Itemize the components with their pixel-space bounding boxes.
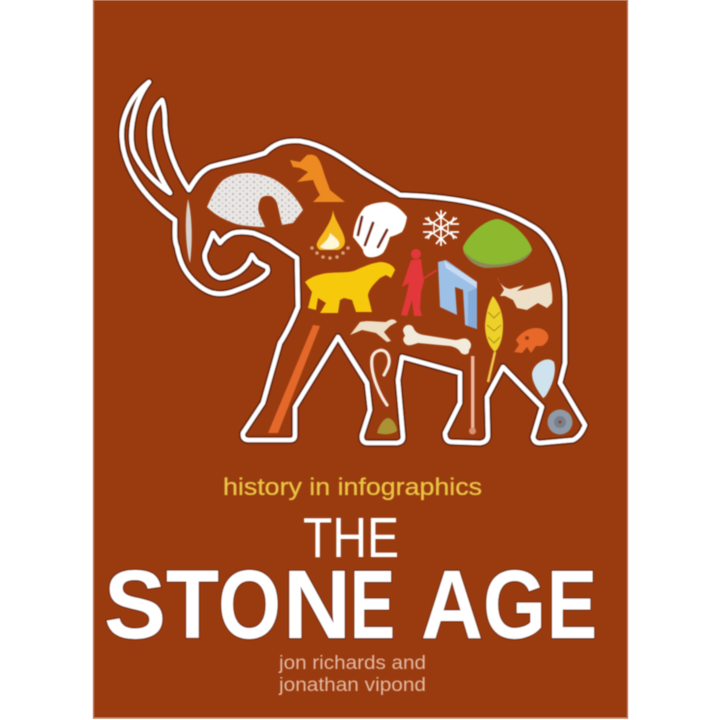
icon: snowflake xyxy=(423,210,459,246)
icon: orange spear shaft xyxy=(268,325,320,433)
authors xyxy=(278,653,426,696)
title: STONE AGE: A xyxy=(421,550,483,659)
icon: campfire xyxy=(310,210,350,260)
icon: wheat ear xyxy=(485,296,503,382)
icon: white bone xyxy=(403,325,471,354)
title: STONE AGE: S xyxy=(104,550,166,659)
title: STONE AGE: E xyxy=(547,550,597,659)
icon: yellow sabre-tooth cat xyxy=(305,262,395,313)
icon: ibex cave painting xyxy=(497,277,552,310)
title: STONE AGE: E xyxy=(350,550,395,659)
icon: red human figure with spear xyxy=(401,249,437,316)
title: STONE AGE: N xyxy=(283,550,351,659)
book cover panel xyxy=(94,0,628,718)
icon: leaping deer painting xyxy=(350,319,397,342)
icon: small skull xyxy=(514,328,548,353)
icon: cave painting rock xyxy=(207,173,303,227)
icon: slender pin xyxy=(469,356,476,434)
title: STONE AGE xyxy=(104,550,597,659)
icon: stone pebble tool xyxy=(377,418,397,434)
icon: stone blade xyxy=(186,199,192,263)
icon: curved bone tool xyxy=(372,350,389,405)
icon: orange bear xyxy=(290,155,345,202)
icon: sabre-tooth skull white xyxy=(353,202,407,257)
authors: jon richards and xyxy=(278,653,426,674)
series label: history in infographics xyxy=(223,474,482,501)
title: STONE AGE: G xyxy=(483,550,546,659)
title: STONE AGE: T xyxy=(166,550,219,659)
icon: green burial mound xyxy=(463,219,532,268)
title: STONE AGE: O xyxy=(218,550,281,659)
icon: stone disc xyxy=(548,410,572,434)
mammoth illustration xyxy=(122,82,585,443)
icon: blue flint arrowhead xyxy=(532,359,555,398)
mammoth outline xyxy=(122,82,585,443)
title: THE: THE xyxy=(303,506,399,570)
authors: jonathan vipond xyxy=(278,675,426,696)
icon: blue stone henge xyxy=(438,260,477,329)
